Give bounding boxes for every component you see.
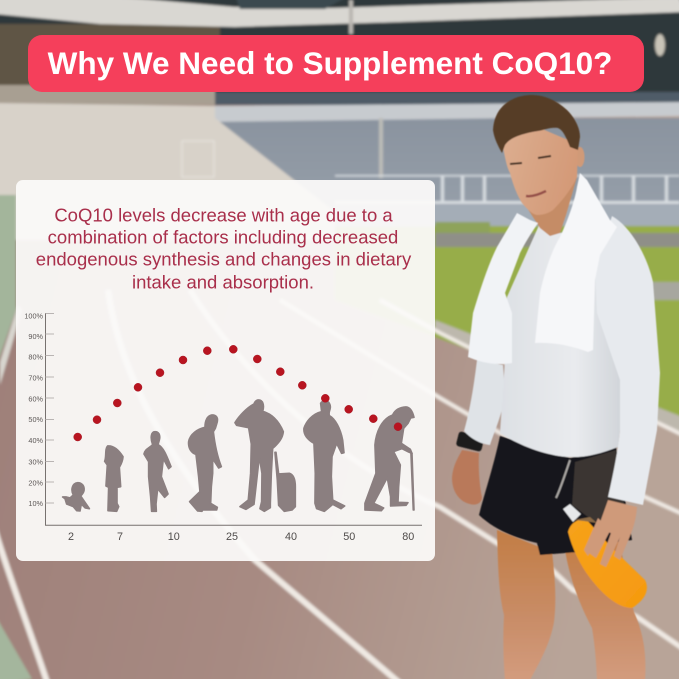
left hand — [452, 450, 482, 505]
eyes and mouth — [510, 156, 551, 164]
description paragraph — [36, 205, 412, 292]
towel left strip — [468, 213, 538, 364]
chart: CoQ10 level by age — [24, 312, 422, 543]
concrete wall, right — [210, 118, 679, 230]
y axis labels: 70% — [28, 374, 44, 382]
CoQ10 level data dots — [74, 345, 402, 441]
right hand — [584, 500, 637, 567]
x axis labels: 25 — [226, 531, 238, 543]
neck — [522, 177, 577, 236]
left leg — [497, 530, 555, 679]
figure: older man, age 50 — [304, 401, 345, 511]
description paragraph: CoQ10 levels decrease with age due to a — [54, 205, 393, 226]
y axis labels — [24, 312, 44, 508]
x axis labels: 2 — [68, 531, 74, 543]
y axis labels: 90% — [28, 332, 44, 341]
figure: teen with backpack, age 25 — [189, 415, 221, 511]
icon: suitcase — [275, 452, 295, 511]
y axis labels: 20% — [28, 478, 44, 488]
bottle — [563, 504, 647, 608]
lawn and side road — [335, 226, 679, 430]
towel right strip — [535, 173, 617, 352]
chart axes — [45, 313, 422, 525]
face — [503, 128, 578, 215]
wristwatch — [456, 431, 485, 452]
right sleeve — [595, 216, 660, 505]
silhouettes of ageing figures — [63, 400, 414, 511]
right leg — [565, 540, 645, 679]
cream concrete wedge, left — [0, 103, 335, 240]
figure: baby, age 2 — [63, 483, 89, 511]
figure: man with luggage, age 40 — [235, 400, 283, 511]
description paragraph: endogenous synthesis and changes in dietary — [36, 249, 412, 270]
left sleeve — [464, 360, 505, 445]
description paragraph: combination of factors including decreased — [48, 227, 398, 248]
pole — [379, 118, 383, 178]
translucent text and chart panel — [16, 180, 435, 561]
x axis labels: 80 — [402, 531, 414, 543]
y axis labels: 10% — [28, 499, 44, 508]
figure: elderly person with cane, age 80 — [365, 407, 414, 511]
title banner: Why We Need to Supplement CoQ10? — [48, 45, 612, 81]
description paragraph: intake and absorption. — [132, 271, 314, 292]
stadium upper stand — [0, 0, 679, 105]
ear — [576, 147, 584, 167]
x axis labels: 40 — [285, 531, 297, 543]
figure: child, age 7 — [105, 446, 123, 511]
left green infield — [0, 195, 16, 370]
y axis labels: 100% — [24, 312, 44, 320]
x axis labels: 50 — [343, 531, 355, 543]
y axis labels: 80% — [28, 352, 44, 362]
figure: boy, age 10 — [144, 432, 171, 511]
x axis labels: 10 — [168, 531, 180, 543]
lane lines — [0, 290, 679, 679]
x axis labels — [68, 531, 414, 543]
y axis labels: 50% — [28, 415, 44, 424]
y axis labels: 60% — [28, 394, 44, 404]
y axis labels: 40% — [28, 436, 44, 445]
athlete with towel and bottle — [452, 95, 660, 679]
title banner — [28, 35, 644, 92]
shorts — [479, 436, 632, 555]
torso shirt — [500, 223, 625, 457]
x axis labels: 7 — [117, 531, 123, 543]
track kerb — [435, 320, 679, 434]
hair — [493, 95, 580, 153]
railing — [335, 175, 679, 204]
y axis labels: 30% — [28, 458, 44, 466]
